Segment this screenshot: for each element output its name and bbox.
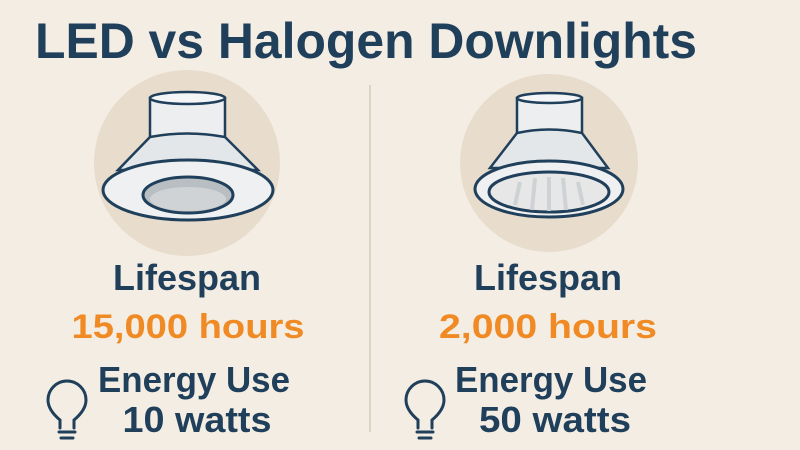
text: LED energy label: Energy Use	[98, 359, 290, 400]
text: Halogen energy label: Energy Use	[455, 359, 647, 400]
icon: bulb	[406, 381, 444, 438]
text: LED energy value: 10 watts	[122, 399, 272, 440]
text: Halogen energy value: 50 watts	[479, 399, 631, 440]
text: LED lifespan label: Lifespan	[113, 257, 261, 298]
text: LED lifespan value: 15,000 hours	[72, 308, 304, 346]
panel: Halogen	[406, 74, 657, 440]
title: LED vs Halogen Downlights	[35, 13, 697, 69]
text: Halogen lifespan value: 2,000 hours	[439, 308, 657, 346]
icon: LED downlight	[94, 70, 280, 256]
panel: LED	[48, 70, 304, 440]
icon: bulb	[48, 381, 86, 438]
text: Halogen lifespan label: Lifespan	[474, 257, 622, 298]
icon: halogen downlight	[460, 74, 638, 252]
